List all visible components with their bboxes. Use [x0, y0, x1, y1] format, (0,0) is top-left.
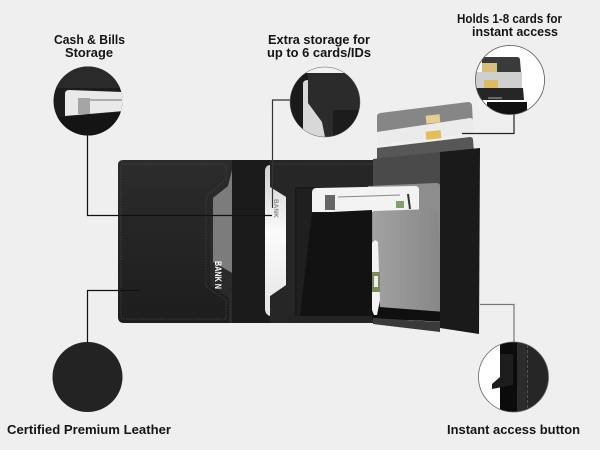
heading: extra storage [267, 32, 371, 60]
heading: holds cards: Holds 1-8 cards for [457, 11, 562, 26]
wallet: grey card in left pocket [213, 170, 232, 273]
wallet: grey card behind bill [368, 183, 442, 300]
wallet: inner pocket [295, 187, 442, 320]
heading: premium leather: Certified Premium Leather [7, 422, 171, 437]
heading: cash and bills storage: Cash & Bills [54, 32, 125, 47]
wallet [118, 148, 480, 334]
heading: cash and bills storage: Storage [65, 45, 113, 60]
heading: holds cards [457, 11, 562, 39]
heading: instant access button: Instant access button [447, 422, 580, 437]
callout circle: cash and bills [53, 66, 124, 136]
wallet: black textured flap [440, 148, 480, 334]
callout circle: instant access button [478, 342, 549, 412]
wallet: lower grey edge [373, 318, 440, 332]
wallet: folded banknote strip [372, 240, 380, 315]
leader line: extra storage [272, 100, 290, 208]
heading: extra storage: Extra storage for [268, 32, 370, 47]
leader line: leather [88, 290, 140, 343]
callout circle: premium leather [52, 342, 122, 412]
leader line: card slots [462, 114, 514, 134]
wallet: backing behind left pocket notch [200, 160, 232, 323]
heading: extra storage: up to 6 cards/IDs [267, 45, 371, 60]
wallet: left leather panel [118, 160, 229, 323]
wallet: black front pocket [300, 210, 372, 316]
wallet: white card in right pocket [265, 165, 286, 316]
wallet: right leather panel [270, 160, 376, 323]
wallet: centre spine [232, 160, 270, 323]
wallet: banknote [312, 186, 419, 212]
callout circle: card slots [475, 45, 545, 115]
heading: cash and bills storage [54, 32, 125, 60]
wallet: grey front plate [373, 209, 445, 312]
leader line: access button [480, 304, 514, 343]
heading: holds cards: instant access [472, 24, 558, 39]
leader line: cash storage [88, 135, 272, 216]
callout circle: extra storage [290, 67, 360, 137]
wallet: grey panel behind flap [373, 152, 440, 190]
wallet: BANK [272, 199, 279, 218]
cards protruding from wallet [377, 102, 474, 160]
wallet: bottom black band [372, 307, 445, 322]
wallet: bank card label: BANK N [213, 261, 223, 289]
